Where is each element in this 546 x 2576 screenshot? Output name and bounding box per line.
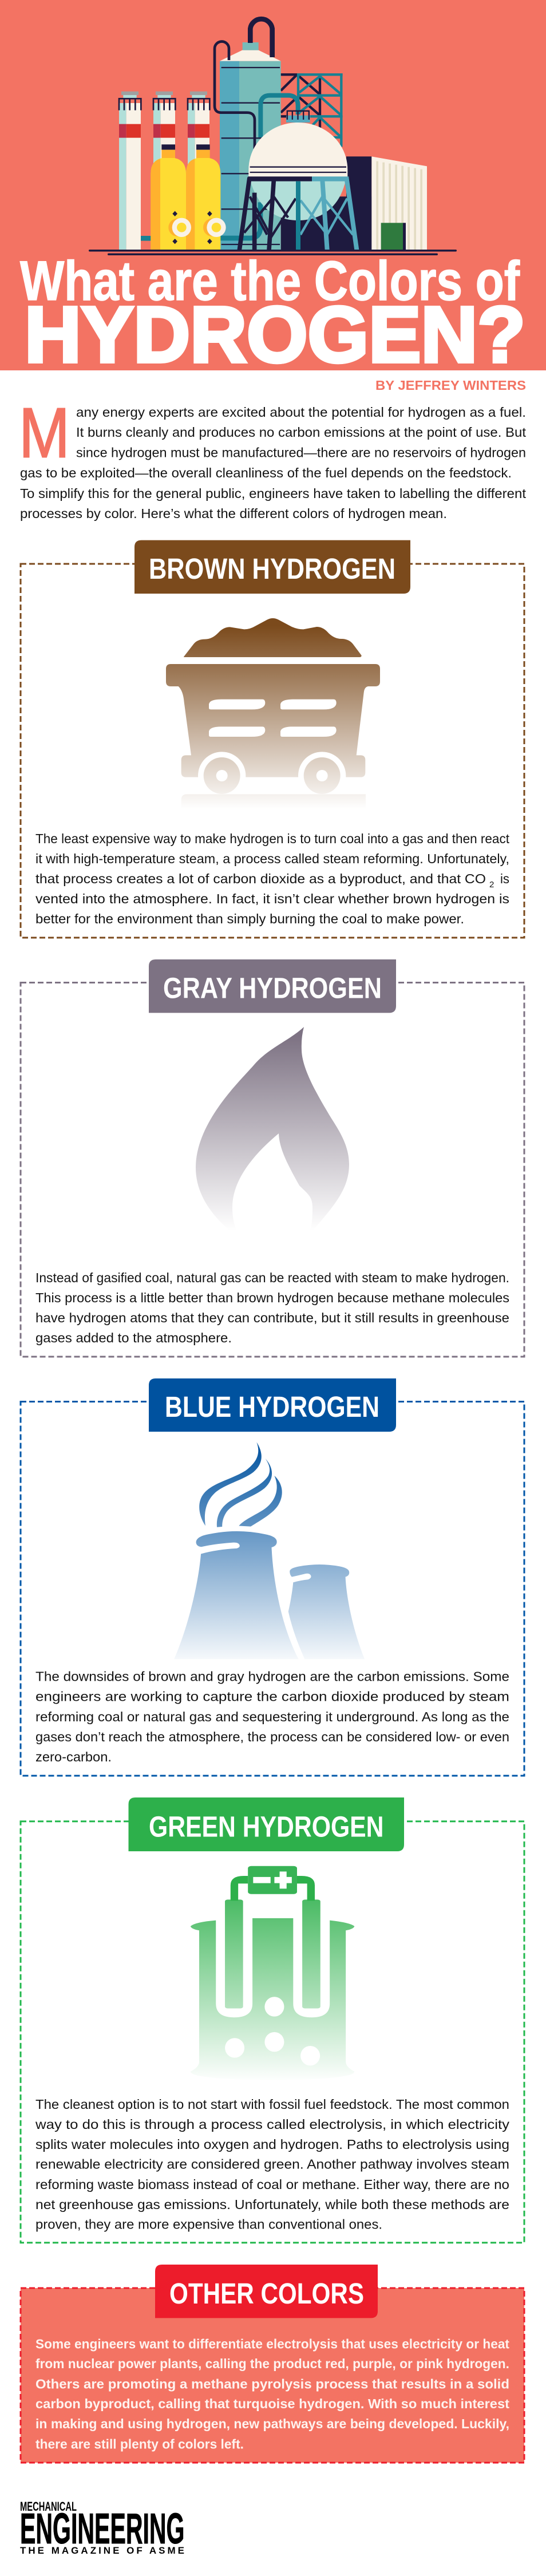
body text: green <box>35 2097 510 2231</box>
panel: blue hydrogen <box>21 1378 524 1776</box>
panel: other colors <box>21 2265 524 2463</box>
body text: other colors: from nuclear power plants, calling the product red, purple, or pink hydrogen. <box>35 2356 509 2371</box>
body text: brown: it with high-temperature steam, a process called steam reforming. Unfortunately, <box>35 851 509 866</box>
pipes <box>128 19 298 241</box>
body text: gray: Instead of gasified coal, natural gas can be reacted with steam to make hydrogen. <box>35 1270 509 1285</box>
body text: blue: The downsides of brown and gray hydrogen are the carbon emissions. Some <box>35 1669 509 1684</box>
body text: other colors <box>35 2336 509 2452</box>
title <box>20 250 525 379</box>
body text: blue: engineers are working to capture the carbon dioxide produced by steam <box>35 1689 509 1704</box>
illustration: hydrogen plant <box>118 19 427 250</box>
intro text block: It burns cleanly and produces no carbon emissions at the point of use. But <box>76 425 527 440</box>
spherical storage tank <box>239 110 357 250</box>
intro text block <box>19 394 527 521</box>
scaffold tower <box>281 74 343 147</box>
body text: green: net greenhouse gas emissions. Unfortunately, while both these methods are <box>35 2197 509 2212</box>
body text: brown: vented into the atmosphere. In fact, it isn’t clear whether brown hydrogen is <box>35 891 509 906</box>
body text: brown: 2 <box>489 880 494 890</box>
body text: green: proven, they are more expensive than conventional ones. <box>35 2217 382 2231</box>
heading: gray hydrogen: GRAY HYDROGEN <box>163 972 382 1005</box>
drop cap: M <box>19 394 70 473</box>
intro text block: To simplify this for the general public, engineers have taken to labelling the different <box>20 486 527 501</box>
panel: gray hydrogen <box>21 959 524 1357</box>
body text: other colors: Some engineers want to differentiate electrolysis that uses electricity or heat <box>35 2336 509 2351</box>
logo: Mechanical Engineering: THE MAGAZINE OF ASME <box>20 2545 184 2556</box>
heading: gray hydrogen <box>149 959 396 1013</box>
yellow gas tanks <box>151 144 226 250</box>
body text: other colors: in making and using hydrogen, new pathways are being developed. Luckily, <box>35 2416 509 2431</box>
body text: gray: This process is a little better than brown hydrogen because methane molecules <box>35 1290 509 1305</box>
body text: brown <box>35 831 510 926</box>
icon: cooling towers with smoke <box>174 1442 365 1659</box>
intro text block: gas to be exploited—the overall cleanliness of the fuel depends on the feedstock. <box>20 465 512 480</box>
intro text block: processes by color. Here’s what the different colors of hydrogen mean. <box>20 506 447 521</box>
chimneys <box>118 92 211 250</box>
panel: brown hydrogen <box>21 540 524 938</box>
body text: brown: better for the environment than simply burning the coal to make power. <box>35 911 464 926</box>
body text: blue: gases don’t reach the atmosphere, the process can be considered low- or even <box>35 1729 509 1744</box>
heading: brown hydrogen: BROWN HYDROGEN <box>149 552 395 585</box>
body text: blue: reforming coal or natural gas and sequestering it underground. As long as the <box>35 1709 509 1724</box>
body text: green: The cleanest option is to not start with fossil fuel feedstock. The most common <box>35 2097 509 2112</box>
icon: flame <box>196 1027 349 1236</box>
body text: gray <box>35 1270 509 1345</box>
heading: blue hydrogen <box>149 1378 396 1432</box>
body text: blue: zero-carbon. <box>35 1749 112 1764</box>
intro text block: since hydrogen must be manufactured—there are no reservoirs of hydrogen <box>76 445 526 460</box>
logo: Mechanical Engineering: MECHANICAL <box>20 2499 77 2514</box>
body text: brown: The least expensive way to make hydrogen is to turn coal into a gas and then react <box>35 831 510 846</box>
body text: blue <box>35 1669 509 1764</box>
body text: brown: is <box>500 871 509 886</box>
body text: other colors: Others are promoting a methane pyrolysis process that results in a solid <box>35 2377 509 2392</box>
heading: brown hydrogen <box>134 540 410 594</box>
heading: green hydrogen: GREEN HYDROGEN <box>149 1810 383 1843</box>
building <box>281 156 427 250</box>
icon: electrolysis beaker <box>191 1866 354 2080</box>
body text: green: splits water molecules into oxygen and hydrogen. Paths to electrolysis using <box>35 2137 509 2152</box>
body text: green: renewable electricity are considered green. Another pathway involves steam <box>35 2157 509 2172</box>
heading: other colors <box>155 2265 378 2318</box>
logo: Mechanical Engineering: ENGINEERING <box>20 2504 184 2553</box>
body text: other colors: carbon byproduct, calling that turquoise hydrogen. With so much interest <box>35 2396 509 2411</box>
heading: green hydrogen <box>128 1797 404 1851</box>
body text: gray: have hydrogen atoms that they can contribute, but it still results in greenhouse <box>35 1310 509 1325</box>
body text: gray: gases added to the atmosphere. <box>35 1330 232 1345</box>
ground lines <box>89 250 457 255</box>
distillation column <box>220 42 281 250</box>
body text: green: reforming waste biomass instead of coal or methane. Either way, there are no <box>35 2177 509 2192</box>
header panel <box>0 0 546 379</box>
body text: green: way to do this is through a process called electrolysis, in which electricity <box>35 2117 510 2132</box>
body text: brown: that process creates a lot of carbon dioxide as a byproduct, and that CO <box>35 871 486 886</box>
title: HYDROGEN? <box>25 291 525 379</box>
icon: coal cart <box>166 618 380 809</box>
logo: Mechanical Engineering <box>20 2499 184 2556</box>
byline: BY JEFFREY WINTERS <box>375 378 526 393</box>
panel: green hydrogen <box>21 1797 524 2243</box>
heading: blue hydrogen: BLUE HYDROGEN <box>165 1390 379 1423</box>
heading: other colors: OTHER COLORS <box>169 2277 364 2310</box>
body text: other colors: there are still plenty of colors left. <box>35 2437 244 2452</box>
intro text block: any energy experts are excited about the potential for hydrogen as a fuel. <box>76 405 526 420</box>
